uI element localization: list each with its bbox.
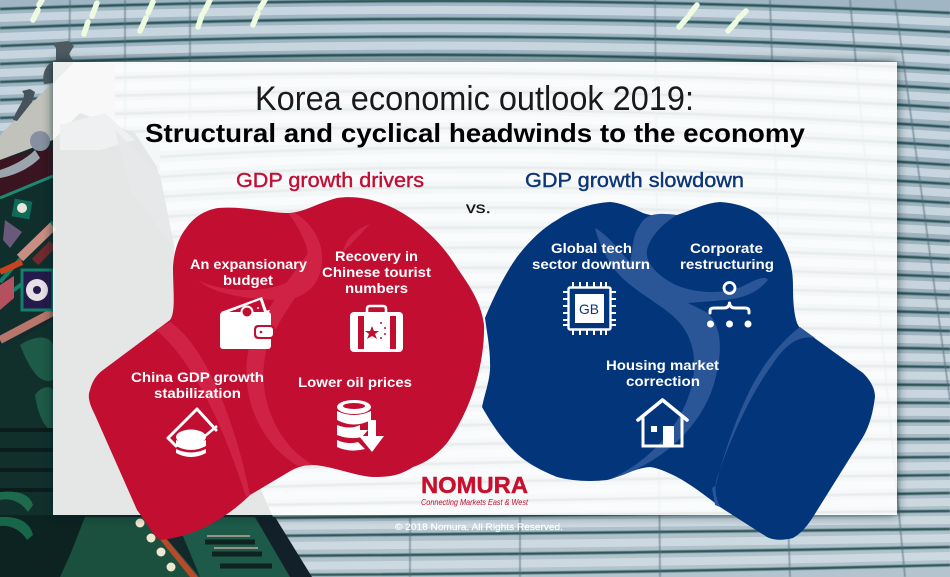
label: Global tech sector downturn: [532, 240, 650, 272]
icon: GB memory chip: GB: [579, 301, 599, 317]
icon: banknote and coins: [168, 409, 217, 457]
icon: house: [638, 400, 687, 446]
label: Global tech sector downturn: sector downturn: [532, 256, 650, 272]
icon: oil barrel with down arrow: [337, 400, 384, 452]
title: [145, 80, 806, 148]
panel: GDP growth slowdown: [482, 202, 875, 540]
label: Recovery in Chinese tourist numbers: Chinese tourist: [322, 264, 431, 280]
logo: Nomura: NOMURA: [421, 472, 528, 498]
red blob: [89, 197, 484, 540]
blue blob: [482, 202, 875, 540]
label: Housing market correction: Housing market: [606, 357, 719, 373]
label: Corporate restructuring: restructuring: [680, 256, 774, 272]
wall: [0, 62, 115, 160]
label: China GDP growth stabilization: China GDP growth: [131, 369, 264, 385]
heading: GDP growth slowdown: GDP growth slowdown: [525, 170, 744, 192]
label: Recovery in Chinese tourist numbers: numbers: [345, 280, 408, 296]
icon: org chart: [707, 282, 752, 328]
label: Global tech sector downturn: Global tech: [551, 240, 632, 256]
icon: GB memory chip: [563, 282, 616, 335]
label: Housing market correction: [606, 357, 719, 389]
statues: [43, 41, 74, 84]
shadow around panel: [53, 62, 897, 515]
label: An expansionary budget: [190, 256, 307, 288]
logo: Nomura: Connecting Markets East & West: [421, 497, 529, 507]
icon: suitcase with Chinese flag: [350, 306, 403, 352]
label: Corporate restructuring: [680, 240, 774, 272]
label: Recovery in Chinese tourist numbers: [322, 248, 431, 296]
title: Korea economic outlook 2019:: [255, 80, 694, 118]
tree swoosh: [595, 214, 815, 507]
icon: wallet: [220, 297, 275, 349]
label: An expansionary budget: An expansionary: [190, 256, 307, 272]
label: Corporate restructuring: Corporate: [690, 240, 763, 256]
label: China GDP growth stabilization: [131, 369, 264, 401]
palace base: [0, 113, 310, 577]
vs label: vs.: [466, 200, 491, 217]
translucent white panel: [53, 62, 897, 515]
label: Housing market correction: correction: [626, 373, 700, 389]
panel: GDP growth drivers: [89, 197, 484, 540]
copyright: © 2018 Nomura. All Rights Reserved.: [395, 522, 563, 533]
label: An expansionary budget: budget: [223, 272, 273, 288]
tree swoosh: [156, 213, 370, 497]
label: Lower oil prices: Lower oil prices: [298, 374, 412, 390]
label: China GDP growth stabilization: stabilization: [154, 385, 241, 401]
label: Recovery in Chinese tourist numbers: Recovery in: [335, 248, 418, 264]
title: Structural and cyclical headwinds to the economy: [145, 118, 806, 148]
heading: GDP growth drivers: GDP growth drivers: [236, 170, 424, 192]
